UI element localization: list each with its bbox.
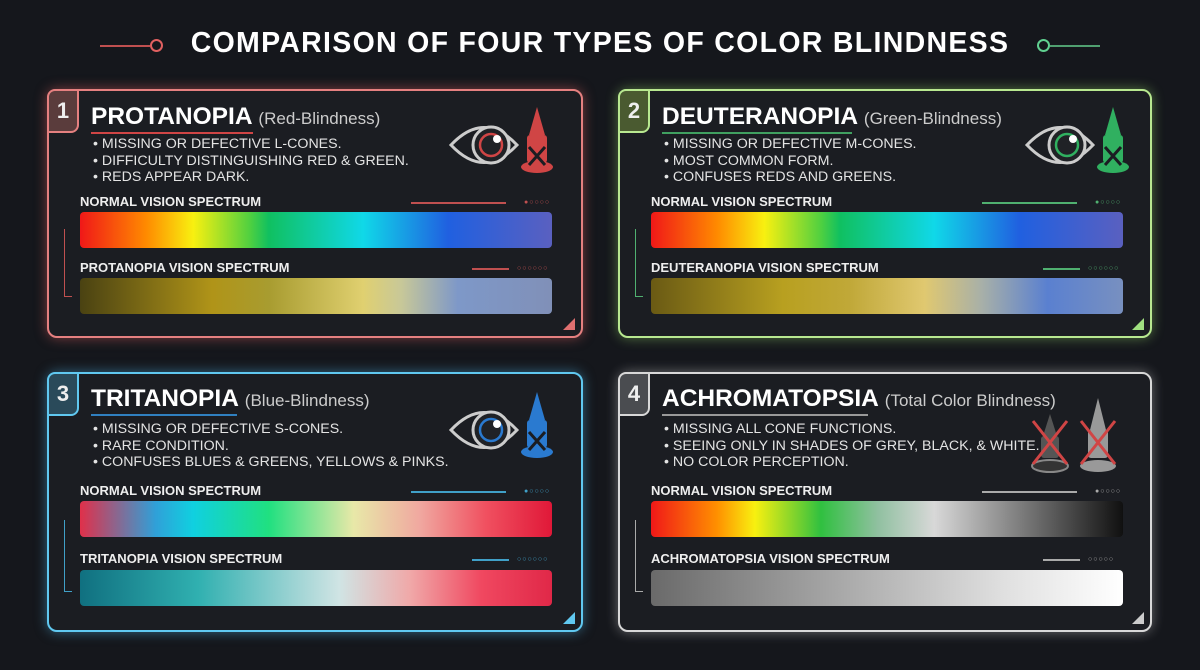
panel: tritanopia: ○○○○○○ <box>517 556 548 563</box>
icon: eye with green cone <box>1025 107 1129 173</box>
bar: normal spectrum <box>80 501 552 537</box>
label: normal: NORMAL VISION SPECTRUM <box>80 483 261 498</box>
panel: achromatopsia: 4 <box>628 381 640 406</box>
panel: deuteranopia: 2 <box>628 98 640 123</box>
label: normal: NORMAL VISION SPECTRUM <box>651 194 832 209</box>
bar: normal spectrum <box>651 212 1123 248</box>
bar: normal spectrum <box>80 212 552 248</box>
bullets <box>93 136 409 185</box>
label: achromatopsia: ACHROMATOPSIA VISION SPECTRUM <box>651 551 890 566</box>
label: protanopia: PROTANOPIA VISION SPECTRUM <box>80 260 289 275</box>
bar: deuteranopia spectrum <box>651 278 1123 314</box>
panel: deuteranopia: ○○○○○○ <box>1088 265 1119 272</box>
bullets <box>93 421 449 470</box>
bullets: • MOST COMMON FORM. <box>664 152 833 168</box>
bullets <box>664 421 1040 470</box>
bullets: • CONFUSES REDS AND GREENS. <box>664 169 896 185</box>
panel: tritanopia: ●○○○○ <box>524 488 550 495</box>
bullets: • DIFFICULTY DISTINGUISHING RED & GREEN. <box>93 152 409 168</box>
panel: achromatopsia <box>618 372 1152 632</box>
panel: tritanopia <box>47 372 583 632</box>
panel: deuteranopia: ●○○○○ <box>1095 199 1121 206</box>
panel: protanopia <box>47 89 583 338</box>
label: tritanopia: TRITANOPIA VISION SPECTRUM <box>80 551 282 566</box>
bar: tritanopia spectrum <box>80 570 552 606</box>
bullets: • MISSING ALL CONE FUNCTIONS. <box>664 421 896 437</box>
title: COMPARISON OF FOUR TYPES OF COLOR BLINDNESS <box>191 27 1009 59</box>
panel: protanopia: ●○○○○ <box>524 199 550 206</box>
panel: achromatopsia: ●○○○○ <box>1095 488 1121 495</box>
heading: PROTANOPIA (Red-Blindness) <box>91 103 380 130</box>
icon: two crossed grey cones <box>1031 398 1116 473</box>
icon: eye with blue cone <box>449 392 553 458</box>
bullets <box>664 136 916 185</box>
bullets: • CONFUSES BLUES & GREENS, YELLOWS & PINKS. <box>93 454 449 470</box>
bullets: • MISSING OR DEFECTIVE L-CONES. <box>93 136 342 152</box>
heading: DEUTERANOPIA (Green-Blindness) <box>662 103 1002 130</box>
panel: protanopia: 1 <box>57 98 69 123</box>
bullets: • RARE CONDITION. <box>93 438 229 454</box>
bar: protanopia spectrum <box>80 278 552 314</box>
panel: achromatopsia: ○○○○○ <box>1088 556 1114 563</box>
bullets: • NO COLOR PERCEPTION. <box>664 454 849 470</box>
icon: eye with red cone <box>449 107 553 173</box>
bullets: • MISSING OR DEFECTIVE M-CONES. <box>664 136 916 152</box>
heading: TRITANOPIA (Blue-Blindness) <box>91 385 370 412</box>
bullets: • REDS APPEAR DARK. <box>93 169 249 185</box>
panel: tritanopia: 3 <box>57 381 69 406</box>
label: normal: NORMAL VISION SPECTRUM <box>651 483 832 498</box>
label: normal: NORMAL VISION SPECTRUM <box>80 194 261 209</box>
bullets: • SEEING ONLY IN SHADES OF GREY, BLACK, & WHITE. <box>664 438 1040 454</box>
heading: ACHROMATOPSIA (Total Color Blindness) <box>662 385 1056 412</box>
bar: normal spectrum <box>651 501 1123 537</box>
panel: protanopia: ○○○○○○ <box>517 265 548 272</box>
panel: deuteranopia <box>618 89 1152 338</box>
bar: achromatopsia spectrum <box>651 570 1123 606</box>
bullets: • MISSING OR DEFECTIVE S-CONES. <box>93 421 343 437</box>
label: deuteranopia: DEUTERANOPIA VISION SPECTRUM <box>651 260 879 275</box>
